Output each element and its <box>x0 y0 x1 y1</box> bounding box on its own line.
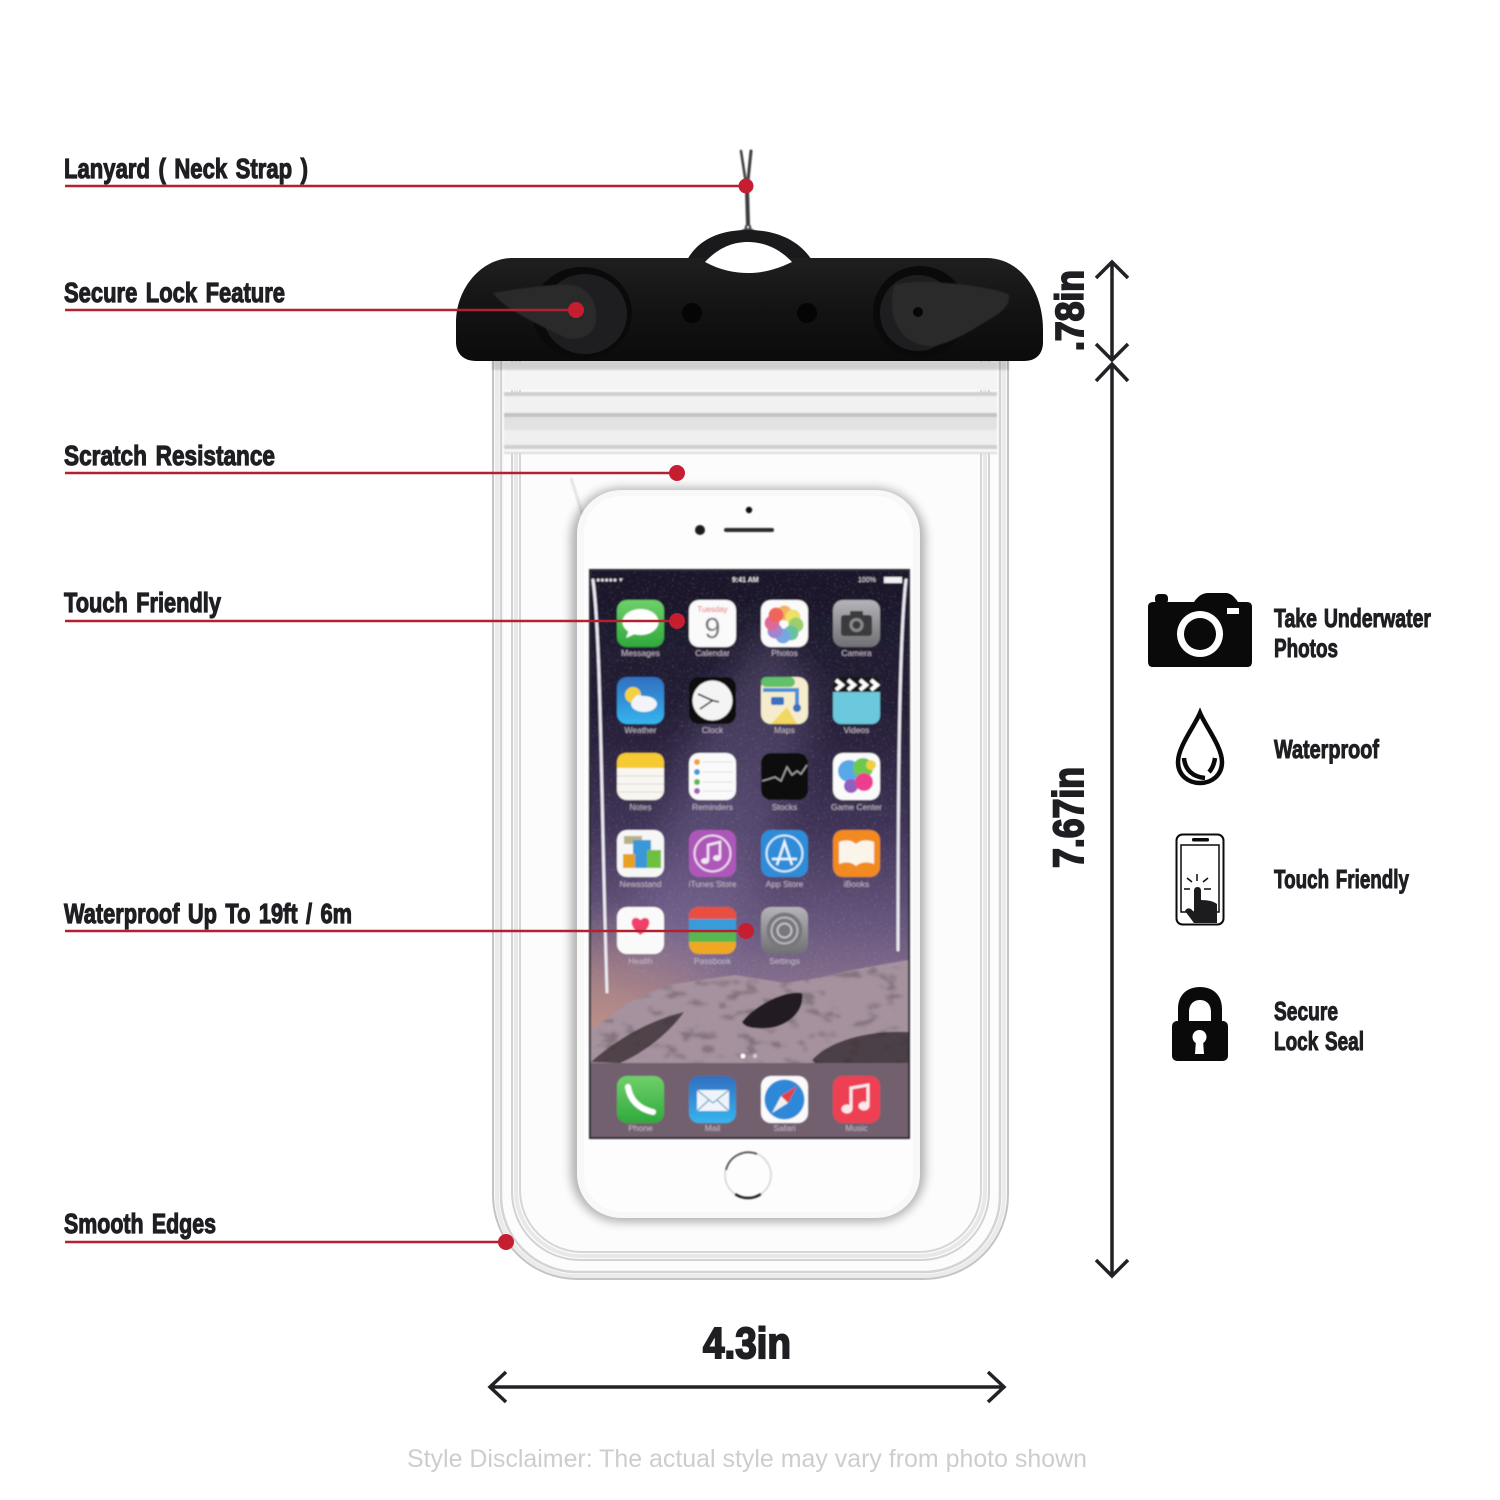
feature: Touch Friendly: Touch Friendly <box>1274 864 1409 894</box>
app: Weather <box>617 677 664 735</box>
app: Calendar: Calendar <box>695 648 730 658</box>
app: Stocks: Stocks <box>772 802 797 812</box>
left lock knob <box>493 267 632 359</box>
phone body <box>571 478 925 1222</box>
app: Safari: Safari <box>773 1123 796 1133</box>
callout: Waterproof depth <box>64 898 754 939</box>
reflection glints <box>593 580 906 992</box>
app: Game Center: Game Center <box>831 802 882 812</box>
feature: Waterproof: Waterproof <box>1274 734 1379 764</box>
callout: Smooth Edges: Smooth Edges <box>64 1208 216 1239</box>
app: Reminders: Reminders <box>692 802 733 812</box>
disclaimer: Style Disclaimer: The actual style may vary from photo shown <box>407 1445 1087 1473</box>
app: Notes: Notes <box>629 802 652 812</box>
callout: Lanyard: Lanyard ( Neck Strap ) <box>64 153 308 184</box>
app: Camera <box>833 600 880 658</box>
dimension: pouch width: 4.3in <box>703 1319 791 1368</box>
app: Messages: Messages <box>621 648 660 658</box>
dock <box>591 1063 908 1137</box>
status bar: 100% <box>858 577 876 584</box>
callout: Touch Friendly <box>64 587 685 629</box>
app: Phone: Phone <box>628 1123 653 1133</box>
clear pouch body <box>492 262 1009 1280</box>
app: App Store <box>761 830 808 889</box>
app: Safari <box>761 1076 808 1133</box>
feature: Secure Lock Seal <box>1172 987 1364 1061</box>
app: Game Center <box>831 753 882 812</box>
mountain <box>591 955 908 1065</box>
app: iTunes Store: iTunes Store <box>689 879 737 889</box>
dimension: height of lock bar <box>1049 262 1128 360</box>
app: Mail <box>689 1076 736 1133</box>
app: Passbook: Passbook <box>694 956 732 966</box>
app: Mail: Mail <box>705 1123 720 1133</box>
app: Health <box>617 907 664 966</box>
app: Newsstand: Newsstand <box>619 879 662 889</box>
app: Settings <box>761 907 808 966</box>
app: Camera: Camera <box>841 648 872 658</box>
phone screen <box>589 569 910 1139</box>
app: Maps <box>761 677 808 735</box>
vent holes <box>682 303 702 323</box>
app: Calendar <box>689 600 736 658</box>
app: Calendar: Tuesday <box>697 605 728 614</box>
icon: phone with tapping hand <box>1176 834 1224 924</box>
app: Health: Health <box>628 956 653 966</box>
feature: Secure Lock Seal: Lock Seal <box>1274 1026 1364 1056</box>
feature: Waterproof <box>1178 713 1379 783</box>
callout: Secure Lock Feature: Secure Lock Feature <box>64 277 285 308</box>
app: Newsstand <box>617 830 664 889</box>
feature: Take Underwater Photos <box>1148 593 1431 667</box>
home button <box>725 1152 771 1198</box>
app: Photos: Photos <box>771 648 798 658</box>
earpiece and sensors <box>695 507 774 535</box>
app: App Store: App Store <box>766 879 804 889</box>
app: Settings: Settings <box>769 956 800 966</box>
callout: Lanyard <box>64 153 754 194</box>
status bar: ●●●●● ▾ <box>596 577 623 584</box>
app: Videos <box>833 677 880 735</box>
callout: Touch Friendly: Touch Friendly <box>64 587 221 618</box>
app: Music <box>833 1076 880 1133</box>
app: iTunes Store <box>689 830 737 889</box>
zip seal stripes <box>504 362 997 454</box>
app: Calendar: 9 <box>704 613 721 645</box>
dimension: pouch width <box>490 1319 1004 1402</box>
app: Maps: Maps <box>774 725 795 735</box>
app: iBooks <box>833 830 880 889</box>
app: Notes <box>617 753 664 812</box>
app: Reminders <box>689 753 736 812</box>
product: phone pouch <box>456 151 1043 1280</box>
app: Passbook <box>689 907 736 966</box>
app: Music: Music <box>845 1123 868 1133</box>
lanyard cord <box>738 151 758 245</box>
feature: Touch Friendly <box>1176 834 1409 924</box>
callout: Smooth Edges <box>64 1208 514 1250</box>
callout: Waterproof depth: Waterproof Up To 19ft / 6m <box>64 898 352 929</box>
app: Clock: Clock <box>702 725 724 735</box>
black lock bar <box>456 230 1043 361</box>
callout: Scratch Resistance <box>64 440 685 481</box>
icon: padlock <box>1172 987 1228 1061</box>
app: Clock <box>689 677 736 735</box>
app: Photos <box>761 600 808 658</box>
dimension: pouch height: 7.67in <box>1045 767 1093 868</box>
callout: Scratch Resistance: Scratch Resistance <box>64 440 275 471</box>
icon: camera <box>1148 593 1252 667</box>
dimension: pouch height <box>1045 364 1128 1276</box>
app: Weather: Weather <box>625 725 657 735</box>
app: iBooks: iBooks <box>844 879 869 889</box>
right lock knob <box>873 266 1009 358</box>
dimension: height of lock bar: .78in <box>1049 270 1092 351</box>
app: Stocks <box>761 753 808 812</box>
status bar: 9:41 AM <box>732 577 759 584</box>
callout: Secure Lock Feature <box>64 277 584 318</box>
feature: Secure Lock Seal: Secure <box>1274 996 1338 1026</box>
feature: Take Underwater Photos: Take Underwater <box>1274 603 1431 633</box>
app: Phone <box>617 1076 664 1133</box>
status bar <box>596 577 902 584</box>
feature: Take Underwater Photos: Photos <box>1274 633 1338 663</box>
app: Videos: Videos <box>844 725 869 735</box>
icon: water drop <box>1178 713 1222 783</box>
app: Messages <box>617 600 664 658</box>
page dots <box>741 1054 757 1058</box>
